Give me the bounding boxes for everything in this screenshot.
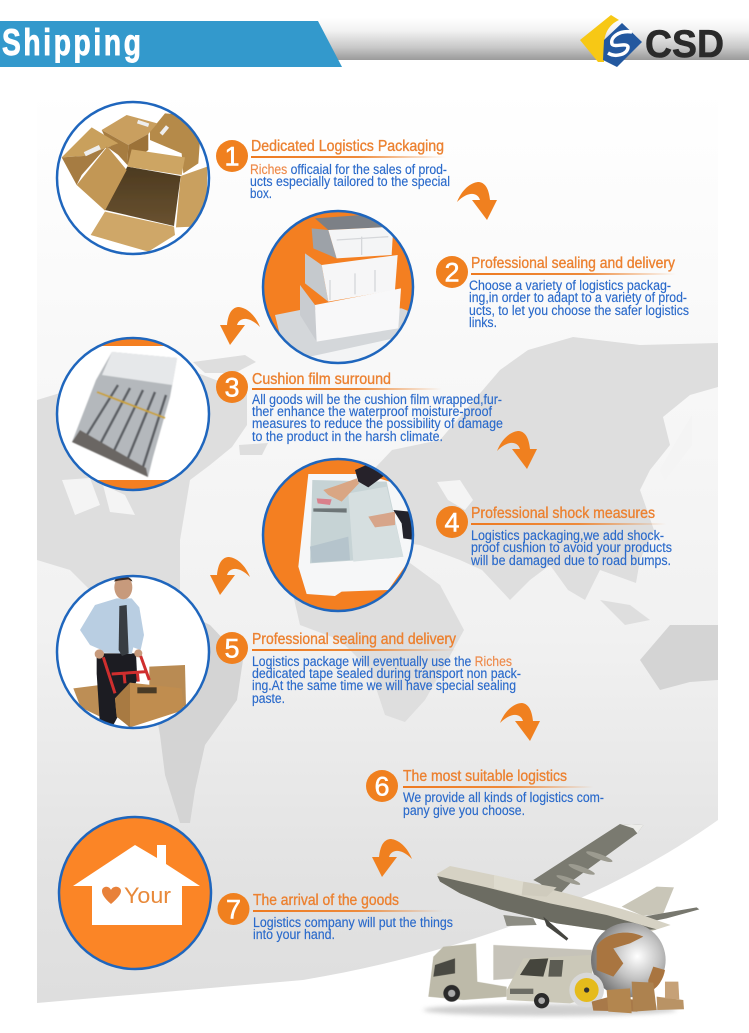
circle outline — [57, 102, 209, 254]
step 5 text: paste. — [252, 691, 285, 706]
step 2 text — [469, 278, 689, 330]
step 7 number badge — [218, 893, 250, 925]
step 7 text: into your hand. — [253, 927, 335, 942]
step 1 text: ucts especially tailored to the special — [250, 174, 450, 189]
step 1 text: box. — [250, 186, 272, 201]
white lower sweep — [37, 820, 718, 1003]
man — [97, 653, 137, 725]
step 1 number badge: 1 — [224, 142, 240, 172]
circle outline — [57, 576, 209, 728]
arrow 1 — [457, 182, 497, 220]
step 1 text: Riches officaial for the sales of prod- — [250, 162, 447, 177]
step 7 heading: The arrival of the goods — [253, 892, 399, 909]
step 5 text: Logistics package will eventually use the Riches — [252, 654, 512, 669]
step 5 number badge — [216, 632, 248, 664]
step 2 heading: Professional sealing and delivery — [471, 255, 675, 272]
step 6 text — [403, 790, 604, 818]
step 6 text: pany give you choose. — [403, 803, 525, 818]
globe with parcels and stopwatch — [569, 923, 684, 1013]
step 5 text: ing.At the same time we will have special sealing — [252, 678, 516, 693]
circle outline — [263, 211, 413, 363]
step 3 photo: cushion film — [57, 336, 209, 492]
world map — [37, 337, 718, 823]
step 1 number badge — [216, 140, 248, 172]
step 3 number badge — [216, 371, 248, 403]
step 2 text: ucts, to let you choose the safer logistics — [469, 303, 689, 318]
header gradient bar — [320, 18, 749, 60]
step 7 text: Logistics company will put the things — [253, 915, 453, 930]
step 4 text: proof cushion to avoid your products — [471, 540, 672, 555]
step 4 number badge: 4 — [444, 508, 460, 538]
step 3 text: All goods will be the cushion film wrapped,fur- — [252, 392, 502, 407]
step 2 text: links. — [469, 315, 497, 330]
heading: Shipping: Shipping — [2, 21, 144, 63]
step 5 text: dedicated tape sealed during transport non pack- — [252, 666, 521, 681]
step 2 text: Choose a variety of logistics packag- — [469, 278, 671, 293]
airplane — [437, 824, 699, 941]
map highlights — [62, 478, 473, 515]
arrow 3 — [497, 431, 537, 469]
step 3 text: ther enhance the waterproof moisture-proof — [252, 404, 492, 419]
step 6 number badge: 6 — [374, 772, 390, 802]
step 1 heading: Dedicated Logistics Packaging — [251, 138, 444, 155]
step 5 text — [252, 654, 521, 706]
step 7 icon: house with heart and Your: Your — [124, 883, 171, 908]
logo: CSD — [580, 15, 724, 67]
step 2 number badge — [436, 256, 468, 288]
step 1 photo: cardboard boxes — [57, 102, 209, 254]
step 4 heading: Professional shock measures — [471, 505, 655, 522]
header banner — [0, 18, 749, 67]
step 4 photo: foam box with hands — [263, 459, 415, 611]
arrow 5 — [500, 703, 540, 741]
boxes behind — [149, 665, 186, 707]
step 6 text: We provide all kinds of logistics com- — [403, 790, 604, 805]
front box — [115, 683, 184, 727]
step 3 number badge: 3 — [224, 372, 240, 402]
step 4 number badge — [436, 506, 468, 538]
step 6 number badge — [366, 770, 398, 802]
step 5 number badge: 5 — [224, 634, 240, 664]
step 3 text: to the product in the harsh climate. — [252, 429, 443, 444]
blue title tab — [0, 21, 342, 67]
logo: CSD: CSD — [645, 23, 724, 66]
circle outline — [263, 459, 413, 611]
step 4 text: will be damaged due to road bumps. — [470, 553, 671, 568]
delivery van — [507, 955, 593, 1008]
step 3 text — [252, 392, 503, 444]
cart — [103, 656, 149, 693]
step 2 photo: foam boxes — [263, 211, 418, 368]
step 7 icon: house with heart and Your — [59, 817, 211, 969]
step 6 heading: The most suitable logistics — [403, 768, 567, 785]
arrow 2 — [220, 307, 260, 345]
step 2 number badge: 2 — [444, 258, 460, 288]
step 7 number badge: 7 — [226, 894, 241, 924]
step 3 text: measures to reduce the possibility of damage — [252, 416, 503, 431]
arrow 6 — [372, 839, 412, 877]
truck — [423, 943, 677, 1016]
step 5 heading: Professional sealing and delivery — [252, 631, 456, 648]
step 3 heading: Cushion film surround — [252, 371, 391, 388]
step 2 text: ing,in order to adapt to a variety of prod- — [469, 290, 687, 305]
step 4 text — [470, 528, 672, 568]
step 1 text — [250, 162, 450, 201]
step 7 text — [253, 915, 453, 942]
circle outline — [57, 338, 209, 490]
step 4 text: Logistics packaging,we add shock- — [471, 528, 664, 543]
arrow 4 — [210, 557, 250, 595]
step 5 photo: delivery man with cart — [57, 575, 209, 728]
